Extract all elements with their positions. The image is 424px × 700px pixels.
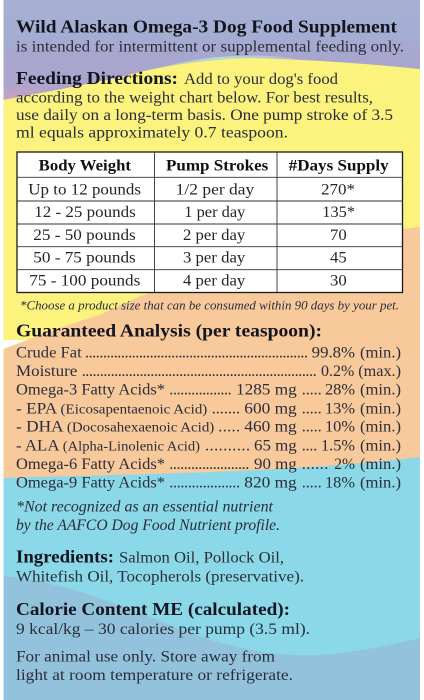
text block: ingredients: Whitefish Oil, Tocopherols (preservative). bbox=[16, 568, 304, 586]
text block: feeding directions: Add to your dog's food bbox=[184, 70, 338, 88]
row: moisture: ................................................................. bbox=[82, 362, 317, 380]
row: omega-6: (min.) bbox=[360, 455, 401, 473]
table: feeding chart: 70 bbox=[330, 227, 347, 244]
row: moisture bbox=[16, 362, 401, 380]
row: omega-3: 28% bbox=[325, 380, 355, 398]
text block: AAFCO note bbox=[16, 498, 280, 534]
text block: calorie content: 9 kcal/kg – 30 calories per pump (3.5 ml). bbox=[16, 620, 310, 638]
analysis list bbox=[16, 343, 401, 492]
text block: calorie content bbox=[16, 599, 310, 638]
text block: calorie content: Calorie Content ME (calculated): bbox=[16, 599, 290, 620]
text block: ingredients bbox=[16, 547, 304, 586]
row: omega-9: (min.) bbox=[360, 474, 401, 492]
table: feeding chart: 135* bbox=[322, 204, 355, 221]
table: feeding chart: 1/2 per day bbox=[176, 181, 254, 198]
table: feeding chart: #Days Supply bbox=[289, 158, 389, 175]
row: omega-3 bbox=[16, 380, 401, 398]
row: moisture: 0.2% bbox=[321, 362, 354, 380]
row: DHA: 10% bbox=[325, 418, 355, 436]
row: omega-3: ................. bbox=[169, 380, 232, 398]
text block: ingredients: Ingredients: bbox=[16, 547, 114, 567]
table: feeding chart bbox=[17, 152, 402, 292]
heading: guaranteed analysis: Guaranteed Analysis (per teaspoon): bbox=[16, 321, 322, 342]
row: omega-6: Omega-6 Fatty Acids* bbox=[16, 455, 165, 473]
row: omega-9: 18% bbox=[325, 474, 355, 492]
table: feeding chart: Up to 12 pounds bbox=[28, 181, 141, 198]
text block: feeding directions: according to the weight chart below. For best results, bbox=[16, 89, 373, 107]
table: feeding chart: 75 - 100 pounds bbox=[29, 272, 140, 289]
table: feeding chart: Body Weight bbox=[39, 158, 132, 175]
row: EPA: ....... bbox=[212, 399, 240, 417]
row: omega-9: 820 mg bbox=[244, 474, 297, 492]
table: feeding chart: 12 - 25 pounds bbox=[34, 204, 136, 221]
table footnote: *Choose a product size that can be consumed within 90 days by your pet. bbox=[20, 297, 399, 312]
row: omega-3: Omega-3 Fatty Acids* bbox=[16, 380, 165, 398]
row: omega-6: 90 mg bbox=[254, 455, 297, 473]
row: DHA: 460 mg bbox=[244, 418, 297, 436]
row: omega-3: ..... bbox=[302, 380, 322, 398]
text block: feeding directions bbox=[16, 68, 393, 142]
row: EPA: ..... bbox=[302, 399, 322, 417]
row: ALA bbox=[16, 436, 401, 454]
row: ALA: - ALA (Alpha-Linolenic Acid) bbox=[16, 436, 200, 454]
row: crude fat: Crude Fat bbox=[16, 343, 82, 361]
row: crude fat bbox=[16, 343, 401, 361]
text block: storage note bbox=[16, 648, 293, 684]
row: DHA: - DHA (Docosahexaenoic Acid) bbox=[16, 418, 215, 436]
text block: ingredients: Salmon Oil, Pollock Oil, bbox=[119, 549, 284, 567]
row: omega-9: Omega-9 Fatty Acids* bbox=[16, 474, 165, 492]
row: DHA: ..... bbox=[302, 418, 322, 436]
row: omega-6: ...................... bbox=[169, 455, 249, 473]
row: EPA: (min.) bbox=[360, 399, 401, 417]
row: omega-6: 2% bbox=[334, 455, 355, 473]
text block: feeding directions: ml equals approximately 0.7 teaspoon. bbox=[16, 124, 288, 142]
row: DHA bbox=[16, 418, 401, 436]
text block: AAFCO note: *Not recognized as an essential nutrient bbox=[16, 498, 273, 516]
row: moisture: (max.) bbox=[358, 362, 401, 380]
title: Wild Alaskan Omega-3 Dog Food Supplement bbox=[16, 16, 397, 36]
text block: storage note: For animal use only. Store away from bbox=[16, 648, 275, 666]
table: feeding chart: 3 per day bbox=[183, 250, 245, 267]
text block: storage note: light at room temperature or refrigerate. bbox=[16, 666, 293, 684]
row: EPA: 13% bbox=[325, 399, 355, 417]
row: crude fat: 99.8% bbox=[312, 343, 355, 361]
row: ALA: 1.5% bbox=[321, 436, 355, 454]
row: ALA: .... bbox=[302, 436, 317, 454]
row: DHA: (min.) bbox=[360, 418, 401, 436]
row: moisture: Moisture bbox=[16, 362, 77, 380]
table: feeding chart: 45 bbox=[330, 250, 347, 267]
table: feeding chart: 4 per day bbox=[183, 272, 245, 289]
row: ALA: 65 mg bbox=[254, 436, 297, 454]
text block: feeding directions: use daily on a long-term basis. One pump stroke of 3.5 bbox=[16, 106, 393, 124]
row: crude fat: (min.) bbox=[360, 343, 401, 361]
row: omega-9: ................... bbox=[169, 474, 240, 492]
title bbox=[16, 16, 404, 56]
row: crude fat: .............................................................. bbox=[85, 343, 308, 361]
row: ALA: (min.) bbox=[360, 436, 401, 454]
row: omega-9: ..... bbox=[302, 474, 322, 492]
row: omega-6: ...... bbox=[302, 455, 328, 473]
table: feeding chart: 2 per day bbox=[183, 227, 245, 244]
table: feeding chart: 1 per day bbox=[184, 204, 245, 221]
row: ALA: .......... bbox=[205, 436, 250, 454]
row: EPA: - EPA (Eicosapentaenoic Acid) bbox=[16, 399, 208, 417]
row: EPA: 600 mg bbox=[244, 399, 297, 417]
row: omega-9 bbox=[16, 474, 401, 492]
row: omega-6 bbox=[16, 455, 401, 473]
row: omega-3: (min.) bbox=[360, 380, 401, 398]
table: feeding chart: 50 - 75 pounds bbox=[33, 250, 136, 267]
row: omega-3: 1285 mg bbox=[236, 380, 297, 398]
text block: feeding directions: Feeding Directions: bbox=[16, 68, 178, 88]
text block: AAFCO note: by the AAFCO Dog Food Nutrient profile. bbox=[16, 516, 280, 534]
table: feeding chart: 25 - 50 pounds bbox=[33, 227, 136, 244]
table: feeding chart: Pump Strokes bbox=[166, 158, 268, 175]
row: EPA bbox=[16, 399, 401, 417]
title: is intended for intermittent or supplemental feeding only. bbox=[16, 38, 404, 56]
table: feeding chart: 270* bbox=[321, 181, 355, 198]
table: feeding chart: 30 bbox=[330, 272, 347, 289]
row: DHA: ..... bbox=[218, 418, 240, 436]
